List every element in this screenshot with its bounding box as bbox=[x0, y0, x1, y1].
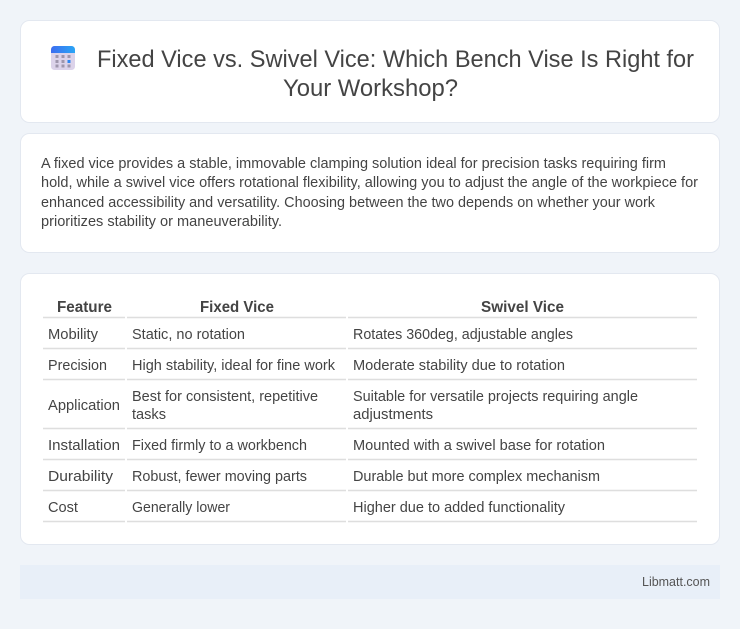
table header row: Swivel Vice bbox=[481, 299, 564, 316]
footer credit: Libmatt.com bbox=[642, 575, 710, 589]
footer bar bbox=[20, 565, 720, 599]
title: Fixed Vice vs. Swivel Vice: Which Bench Vise Is Right for bbox=[97, 46, 694, 73]
row: durability: Durable but more complex mechanism bbox=[353, 469, 600, 485]
row: mobility: Static, no rotation bbox=[132, 327, 245, 343]
row: application: adjustments bbox=[353, 407, 433, 423]
row: application bbox=[48, 389, 638, 423]
comparison table card bbox=[20, 274, 720, 544]
intro paragraph: A fixed vice provides a stable, immovable clamping solution ideal for precision tasks requiring firm bbox=[41, 156, 666, 172]
row: mobility: Mobility bbox=[48, 327, 99, 343]
row: cost: Cost bbox=[48, 500, 78, 516]
intro paragraph bbox=[41, 156, 698, 230]
intro paragraph: hold, while a swivel vice offers rotational flexibility, allowing you to adjust the angle of the workpiece for bbox=[41, 175, 698, 191]
title bbox=[97, 46, 694, 102]
row: application: tasks bbox=[132, 407, 166, 423]
row: cost bbox=[48, 500, 566, 516]
icon: calendar bbox=[51, 46, 75, 70]
table header row: Feature bbox=[57, 299, 112, 316]
row: cost: Generally lower bbox=[132, 500, 230, 516]
intro paragraph: enhanced accessibility and versatility. Choosing between the two depends on whether your work bbox=[41, 195, 656, 211]
header card bbox=[20, 20, 720, 122]
title: Your Workshop? bbox=[283, 75, 458, 102]
intro text card bbox=[20, 134, 720, 252]
row: mobility: Rotates 360deg, adjustable angles bbox=[353, 327, 573, 343]
row: mobility bbox=[48, 327, 573, 343]
row: application: Application bbox=[48, 398, 120, 414]
row: installation bbox=[48, 438, 605, 454]
row: durability: Robust, fewer moving parts bbox=[132, 469, 307, 485]
row: installation: Installation bbox=[48, 438, 120, 454]
intro paragraph: prioritizes stability or maneuverability. bbox=[41, 214, 282, 230]
row: durability bbox=[48, 469, 600, 485]
row: application: Suitable for versatile projects requiring angle bbox=[353, 389, 638, 405]
row: durability: Durability bbox=[48, 469, 114, 485]
row: application: Best for consistent, repetitive bbox=[132, 389, 318, 405]
row: cost: Higher due to added functionality bbox=[353, 500, 566, 516]
row: precision bbox=[48, 358, 565, 374]
row: installation: Fixed firmly to a workbench bbox=[132, 438, 307, 454]
row: precision: High stability, ideal for fine work bbox=[132, 358, 336, 374]
row: installation: Mounted with a swivel base for rotation bbox=[353, 438, 605, 454]
row: precision: Moderate stability due to rotation bbox=[353, 358, 565, 374]
table header row bbox=[57, 299, 564, 316]
row: precision: Precision bbox=[48, 358, 107, 374]
table header row: Fixed Vice bbox=[200, 299, 274, 316]
